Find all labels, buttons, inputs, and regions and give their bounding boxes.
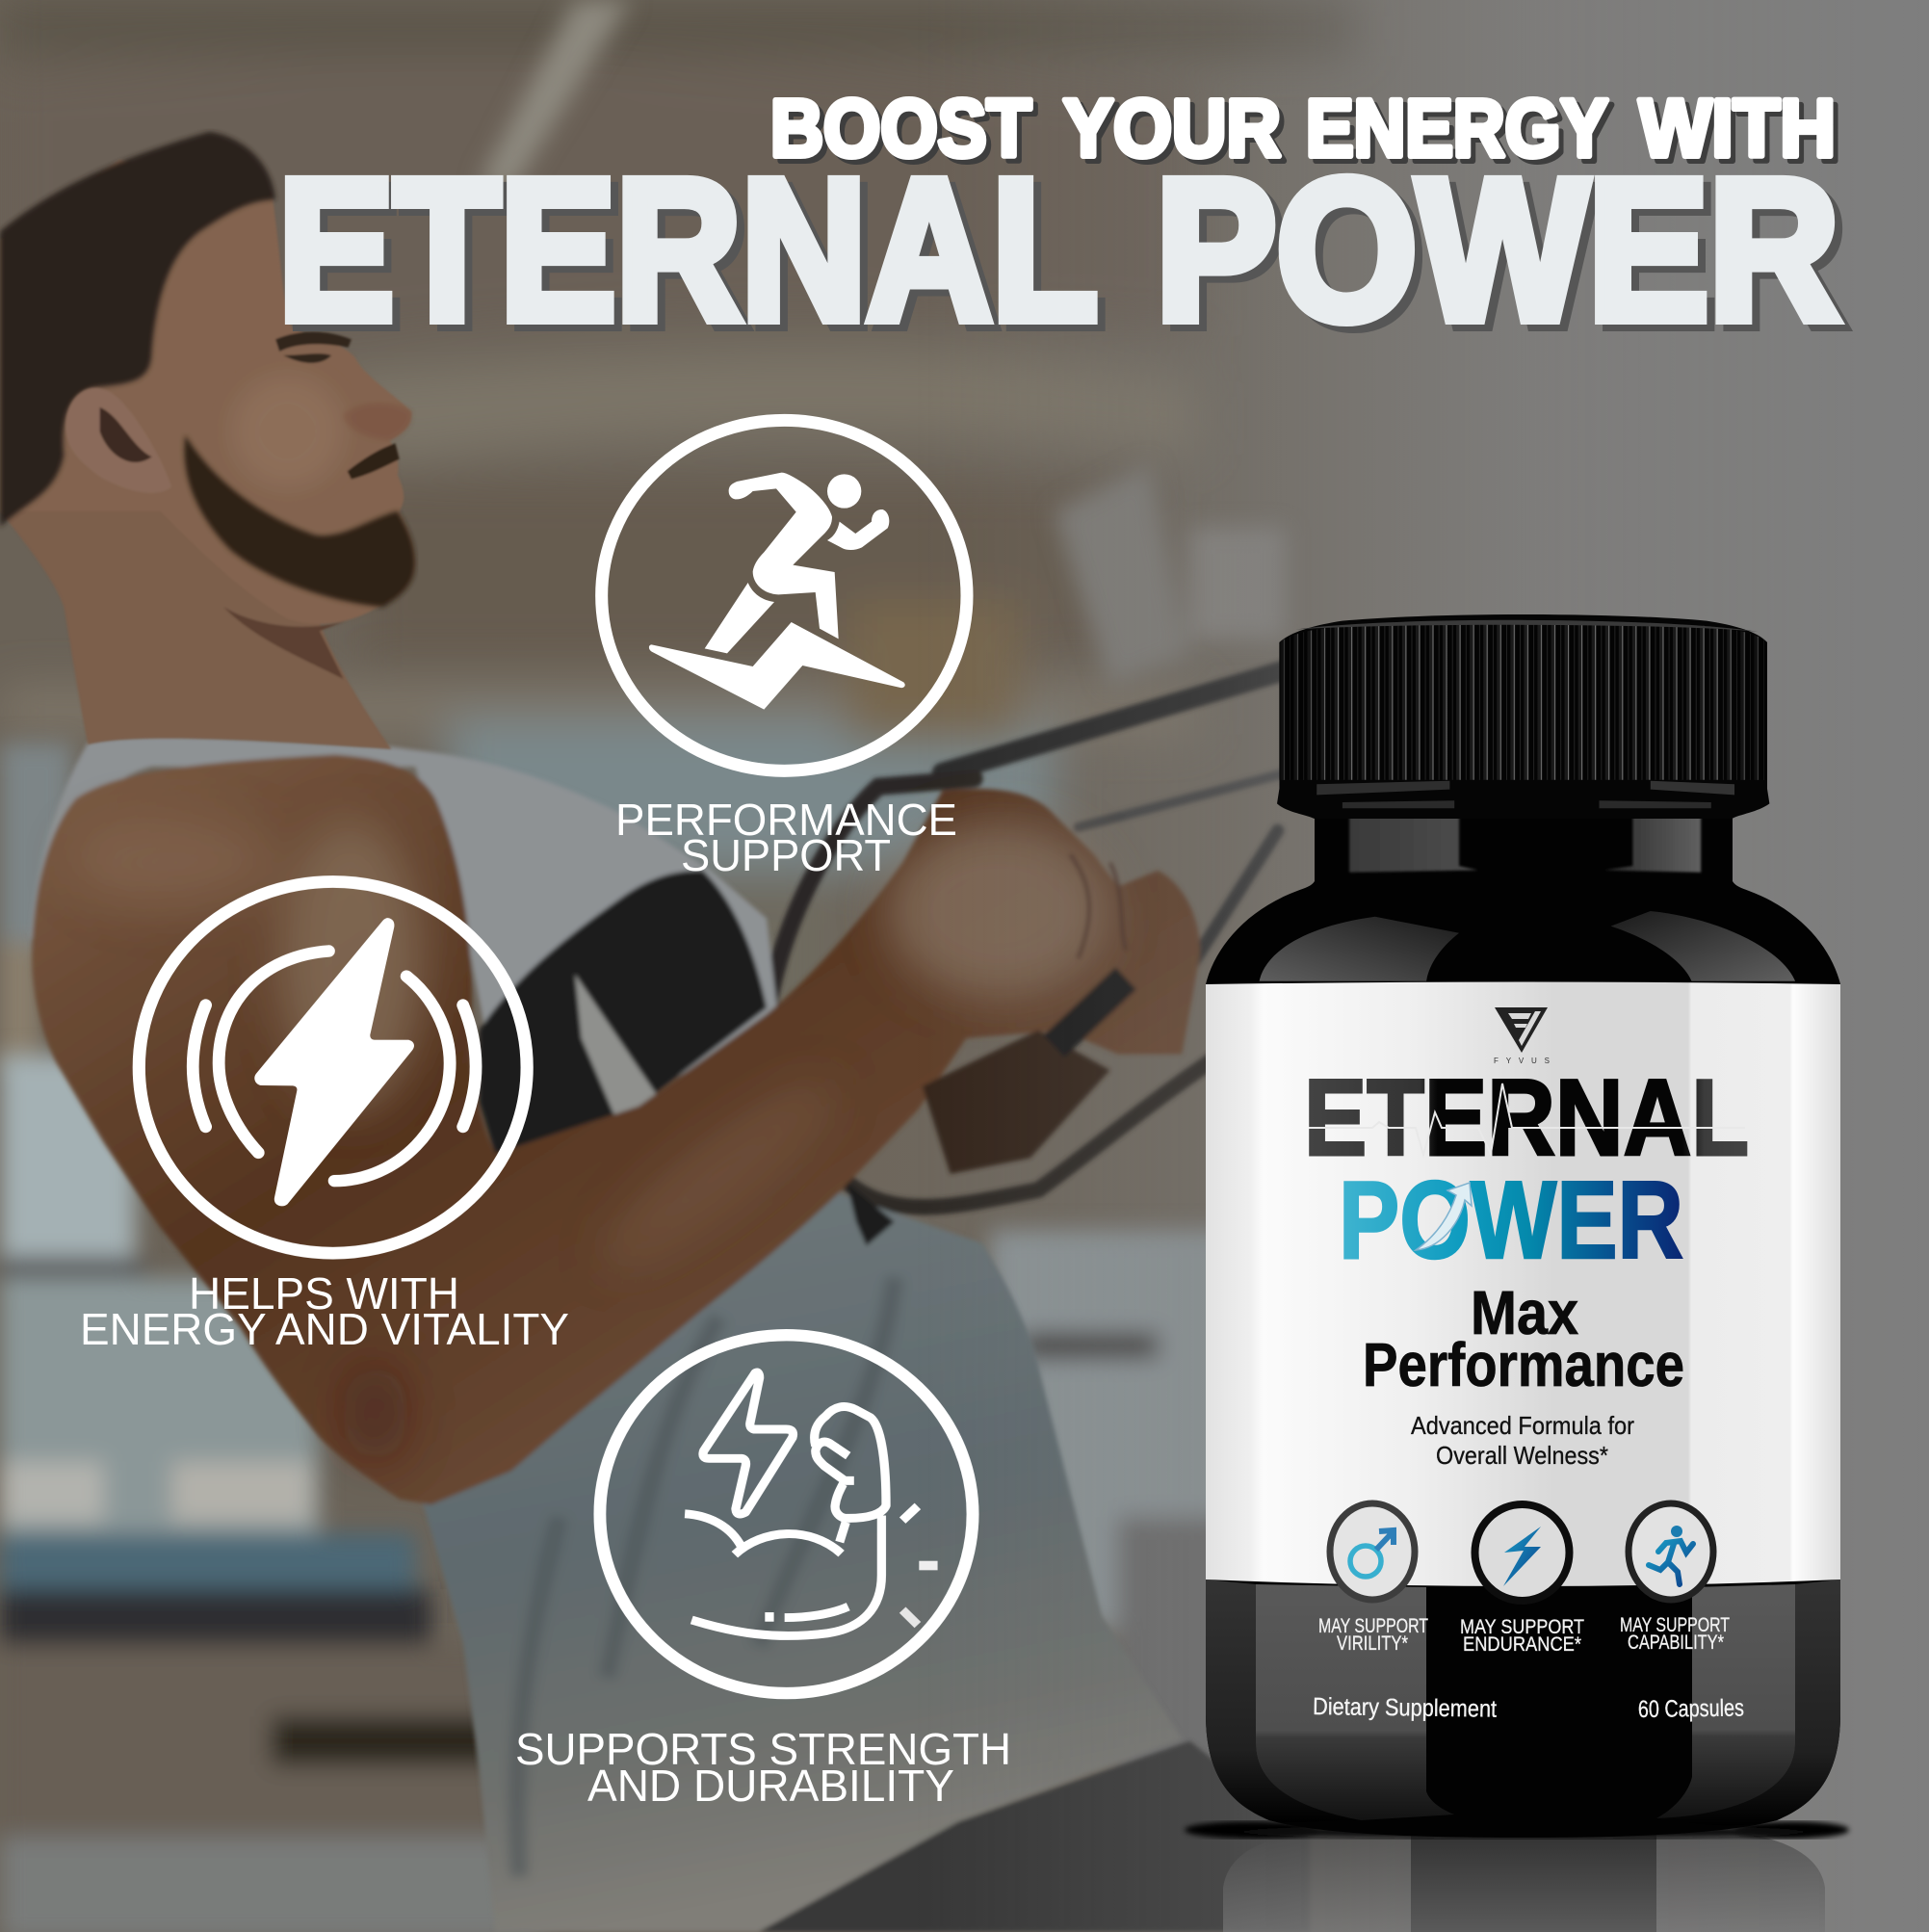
- title line 2: POWER: [1163, 145, 1847, 369]
- label: PERFORMANCE: [615, 795, 957, 845]
- product name: POWER: POWER: [1339, 1160, 1683, 1282]
- waistband: [759, 1741, 1310, 1932]
- title line 1: BOOST: [770, 83, 1031, 173]
- product subtitle: Performance: [1363, 1330, 1684, 1399]
- wrist glove and handle: [923, 1031, 1110, 1174]
- supplement and capsule count: [1313, 1693, 1744, 1723]
- label icon: endurance: [1475, 1504, 1570, 1601]
- label: [615, 795, 957, 880]
- dark shirt band: [480, 871, 767, 1154]
- face: [0, 160, 415, 624]
- supplement and capsule count: Dietary Supplement: [1313, 1693, 1497, 1723]
- label benefit text: CAPABILITY*: [1628, 1632, 1724, 1654]
- ear: [65, 388, 171, 493]
- label: SUPPORTS STRENGTH: [515, 1724, 1011, 1774]
- formula text: [1411, 1411, 1634, 1470]
- shoulder and neck highlights: [1260, 814, 1795, 981]
- icon: runner in circle: [602, 420, 967, 770]
- title line 1: YOUR: [1063, 83, 1281, 173]
- label: HELPS WITH: [189, 1268, 459, 1318]
- tank top body: [423, 1193, 1182, 1932]
- neck shadow: [223, 607, 352, 679]
- tank fold shadows: [517, 1278, 895, 1877]
- title line 1: BOOST: [775, 88, 1036, 178]
- bottle body silhouette: [1206, 819, 1840, 1838]
- label: [515, 1724, 1011, 1811]
- grey fade over right side: [915, 0, 1929, 1932]
- hand knuckle lines: [1070, 854, 1126, 958]
- benefit 2: energy and vitality: [80, 881, 569, 1354]
- tank top shoulder and chest: [31, 737, 778, 1166]
- title line 2: ETERNAL: [278, 139, 1098, 362]
- beard: [184, 435, 415, 607]
- product subtitle: [1363, 1278, 1684, 1399]
- neck: [0, 383, 391, 749]
- bottle cap: [1277, 614, 1769, 819]
- label benefit text: ENDURANCE*: [1463, 1633, 1581, 1656]
- white label: [1206, 982, 1840, 1586]
- label: AND DURABILITY: [587, 1761, 954, 1811]
- product subtitle: Max: [1471, 1278, 1578, 1347]
- straps and handles: [767, 663, 1310, 1207]
- label: ENERGY AND VITALITY: [80, 1304, 569, 1354]
- title line 2: ETERNAL: [286, 145, 1106, 369]
- label benefit text: MAY SUPPORT: [1620, 1614, 1730, 1636]
- label benefit text: MAY SUPPORT: [1460, 1616, 1584, 1638]
- benefit 3: strength and durability: [515, 1335, 1011, 1811]
- title line 2: [278, 139, 1847, 369]
- bottle reflection on floor: [1185, 1821, 1849, 1932]
- photo: athlete pulling suspension straps: [0, 132, 1310, 1932]
- icon: flexed arm with bolt in circle: [600, 1335, 973, 1693]
- formula text: Overall Welness*: [1436, 1441, 1608, 1470]
- brand logo: FYVUS: [1494, 1057, 1550, 1065]
- label: SUPPORT: [681, 830, 891, 880]
- title line 1: WITH: [1639, 83, 1836, 173]
- hair: [0, 132, 275, 527]
- title line 1: [770, 83, 1840, 178]
- label icon: capability: [1629, 1503, 1713, 1600]
- label: [80, 1268, 569, 1354]
- icon: lightning bolt in circle: [139, 881, 527, 1253]
- ear shadow: [100, 407, 152, 462]
- label benefit text: [1318, 1614, 1730, 1656]
- title line 1: YOUR: [1068, 88, 1286, 178]
- nose shading: [344, 403, 411, 441]
- brand logo: [1494, 1007, 1550, 1065]
- title line 1: ENERGY: [1311, 88, 1613, 178]
- arm highlights: [72, 815, 1110, 1461]
- upper arm and forearm: [32, 755, 1200, 1504]
- formula text: Advanced Formula for: [1411, 1411, 1634, 1440]
- title line 1: WITH: [1644, 88, 1840, 178]
- lower body reflections: [1206, 1580, 1361, 1822]
- product name: ETERNAL: ETERNAL: [1304, 1057, 1749, 1178]
- product bottle: [1206, 614, 1840, 1838]
- label benefit text: MAY SUPPORT: [1318, 1615, 1428, 1637]
- title line 2: POWER: [1156, 139, 1839, 362]
- grey wedge: [575, 975, 659, 1116]
- moustache: [348, 443, 400, 480]
- supplement and capsule count: 60 Capsules: [1638, 1694, 1744, 1723]
- cheek highlight: [231, 376, 344, 487]
- label icon: virility: [1330, 1503, 1415, 1600]
- title line 1: ENERGY: [1306, 83, 1608, 173]
- label benefit text: VIRILITY*: [1337, 1632, 1408, 1655]
- eye and brow: [275, 332, 352, 363]
- benefit 1: performance support: [602, 420, 967, 880]
